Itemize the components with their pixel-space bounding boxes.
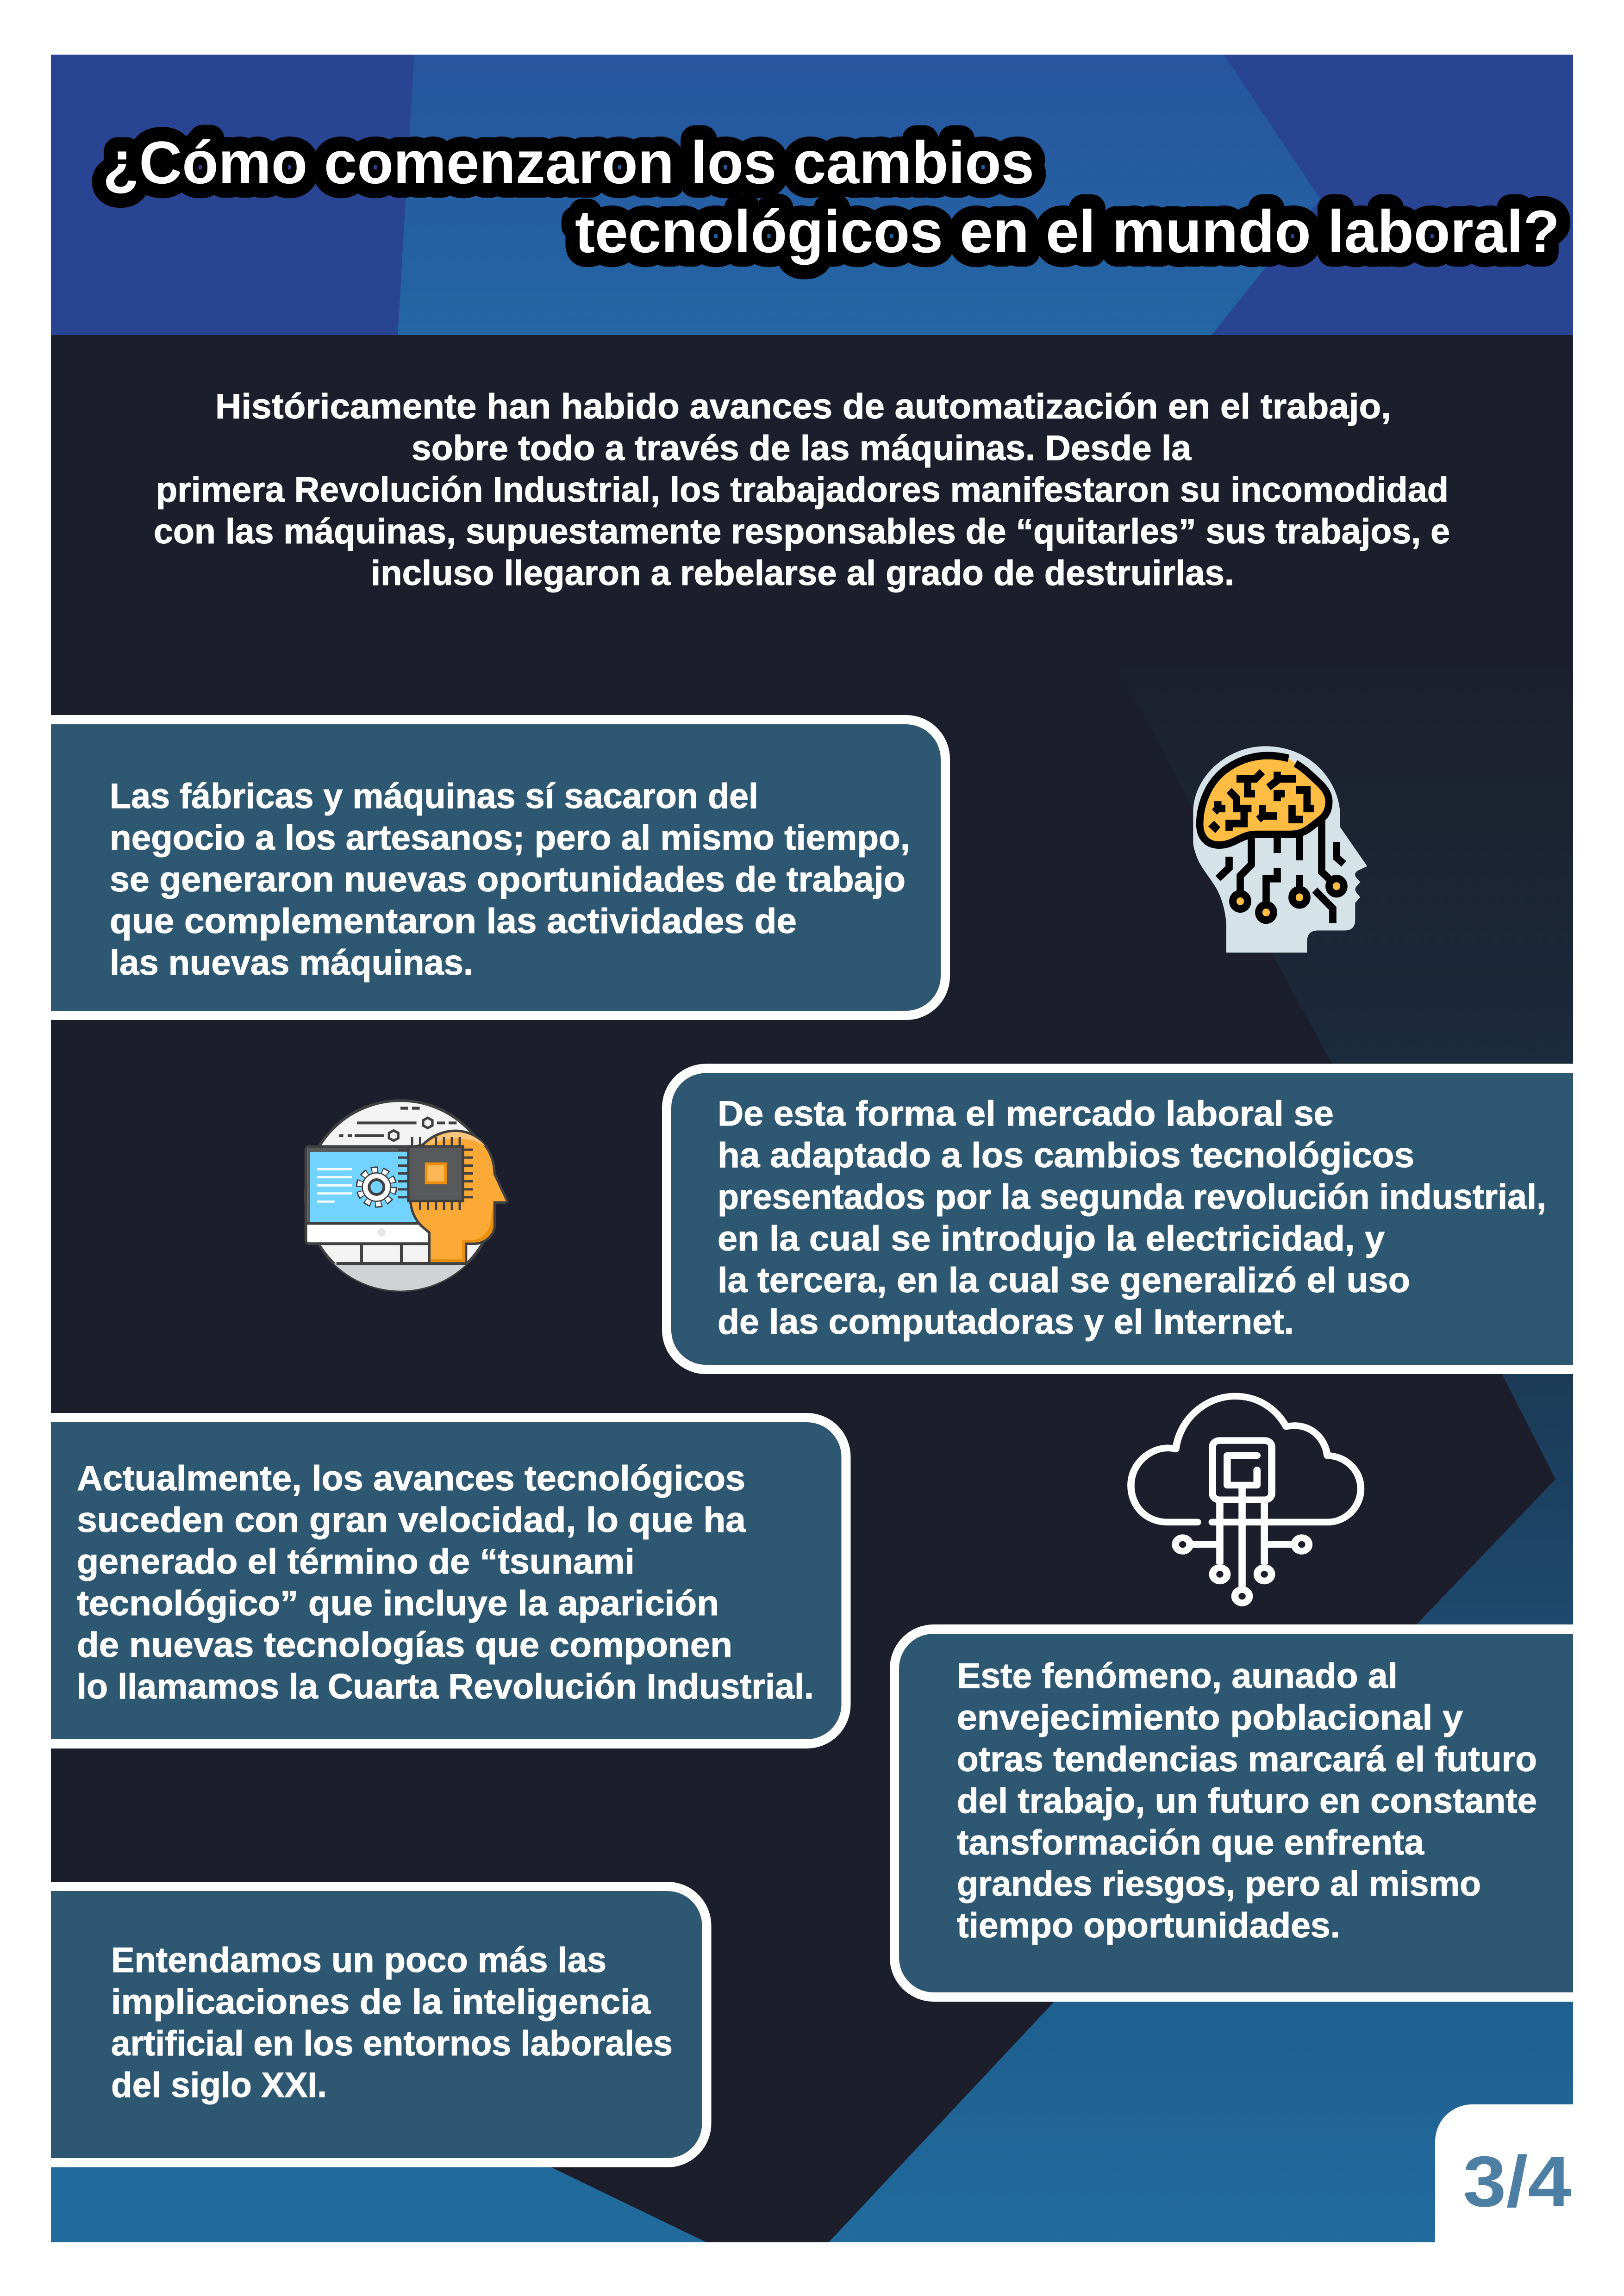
text block: futuro del trabajo: grandes riesgos, pero al mismo [957, 1864, 1481, 1904]
text block: introduction [154, 387, 1450, 593]
text block: futuro del trabajo [957, 1656, 1537, 1945]
panel: dark background [51, 335, 1573, 2242]
icon: head with brain circuit [1193, 746, 1367, 952]
panel: futuro del trabajo [894, 1629, 1573, 1997]
title: tecnológicos en el mundo laboral? [575, 198, 1560, 265]
icon: cloud with circuit [1131, 1396, 1361, 1603]
text block: mercado laboral: presentados por la segunda revolución industrial, [718, 1177, 1546, 1217]
icon: computer and head with chip [306, 1101, 507, 1291]
page number badge [1435, 2104, 1573, 2244]
background shape: upper right [1118, 669, 1573, 1064]
text block: tsunami tecnológico: suceden con gran velocidad, lo que ha [77, 1500, 746, 1540]
text block: introduction: sobre todo a través de las máquinas. Desde la [412, 429, 1192, 468]
text block: artesanos: se generaron nuevas oportunidades de trabajo [110, 860, 906, 899]
background shape: bottom right [829, 2001, 1573, 2242]
text block: introduction: primera Revolución Industrial, los trabajadores manifestaron su incomodidad [156, 470, 1449, 510]
text block: artesanos: Las fábricas y máquinas sí sacaron del [110, 777, 758, 816]
background shape: bottom left [51, 2167, 706, 2242]
text block: inteligencia artificial [111, 1941, 673, 2105]
page number badge: 3/4 [1463, 2141, 1571, 2221]
text block: futuro del trabajo: tiempo oportunidades. [957, 1906, 1340, 1945]
text block: tsunami tecnológico [77, 1459, 814, 1706]
text block: tsunami tecnológico: Actualmente, los avances tecnológicos [77, 1459, 745, 1498]
text block: tsunami tecnológico: lo llamamos la Cuarta Revolución Industrial. [77, 1667, 814, 1706]
panel: inteligencia artificial [51, 1886, 706, 2163]
text block: tsunami tecnológico: tecnológico” que incluye la aparición [77, 1584, 719, 1623]
text block: inteligencia artificial: artificial en los entornos laborales [111, 2024, 673, 2063]
text block: introduction: Históricamente han habido avances de automatización en el trabajo, [215, 387, 1391, 426]
text block: futuro del trabajo: envejecimiento poblacional y [957, 1698, 1463, 1737]
panel: mercado laboral [667, 1068, 1573, 1369]
background shape: right chevron [1417, 1374, 1573, 1624]
text block: mercado laboral [718, 1094, 1546, 1342]
text block: tsunami tecnológico: generado el término de “tsunami [77, 1542, 635, 1581]
text block: inteligencia artificial: Entendamos un poco más las [111, 1941, 606, 1980]
panel: title banner [51, 55, 1573, 335]
text block: mercado laboral: ha adaptado a los cambios tecnológicos [718, 1136, 1414, 1175]
text block: mercado laboral: de las computadoras y el Internet. [718, 1302, 1294, 1342]
title [103, 129, 1560, 265]
text block: artesanos [110, 777, 910, 983]
text block: mercado laboral: la tercera, en la cual se generalizó el uso [718, 1261, 1410, 1300]
text block: inteligencia artificial: implicaciones de la inteligencia [111, 1982, 651, 2022]
panel: artesanos [51, 720, 945, 1015]
panel: tsunami tecnológico [51, 1418, 846, 1744]
text block: artesanos: que complementaron las actividades de [110, 902, 797, 941]
text block: introduction: incluso llegaron a rebelarse al grado de destruirlas. [371, 554, 1234, 593]
text block: artesanos: las nuevas máquinas. [110, 943, 473, 983]
text block: mercado laboral: De esta forma el mercado laboral se [718, 1094, 1334, 1133]
text block: futuro del trabajo: otras tendencias marcará el futuro [957, 1740, 1537, 1779]
text block: futuro del trabajo: del trabajo, un futuro en constante [957, 1781, 1537, 1821]
text block: futuro del trabajo: Este fenómeno, aunado al [957, 1656, 1398, 1696]
text block: artesanos: negocio a los artesanos; pero al mismo tiempo, [110, 818, 910, 858]
text block: futuro del trabajo: tansformación que enfrenta [957, 1823, 1424, 1862]
title: ¿Cómo comenzaron los cambios [103, 129, 1034, 196]
text block: mercado laboral: en la cual se introdujo la electricidad, y [718, 1219, 1385, 1258]
text block: tsunami tecnológico: de nuevas tecnologías que componen [77, 1625, 732, 1665]
text block: introduction: con las máquinas, supuestamente responsables de “quitarles” sus trabajos, e [154, 512, 1450, 551]
text block: inteligencia artificial: del siglo XXI. [111, 2066, 327, 2105]
